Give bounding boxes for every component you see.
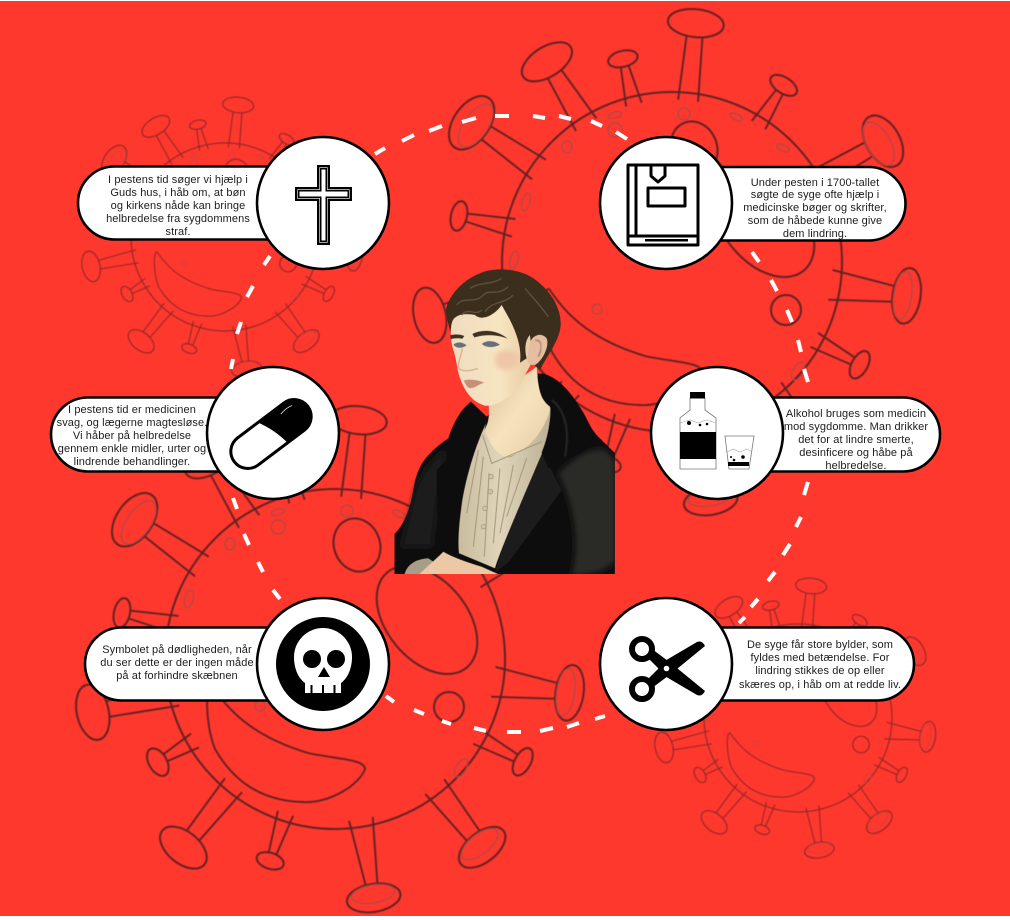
background virus: bottom right <box>652 577 938 860</box>
hood fold <box>552 400 567 457</box>
text bubble: boils: lindring stikkes de op eller <box>755 665 885 677</box>
item: medicine capsule <box>51 367 339 499</box>
text bubble: death: du ser dette er der ingen måde <box>100 657 254 669</box>
item: church cross <box>78 137 389 269</box>
text bubble: church <box>78 166 338 240</box>
hands <box>418 552 500 575</box>
text bubble: church: straf. <box>165 226 191 238</box>
nose <box>458 348 478 371</box>
text bubble: boils: fyldes med betændelse. For <box>751 652 890 664</box>
icon: skull <box>257 598 389 730</box>
text bubble: book: søgte de syge ofte hjælp i <box>751 189 879 201</box>
hair front <box>446 269 557 363</box>
eyebrows <box>450 331 508 339</box>
text bubble: alcohol: helbredelse. <box>825 460 887 472</box>
icon: bottle and glass <box>651 367 783 499</box>
item: medical book <box>600 137 906 269</box>
text bubble: medicine <box>51 398 311 472</box>
item: alcohol <box>651 367 940 499</box>
text bubble: alcohol: Alkohol bruges som medicin <box>786 408 926 420</box>
text bubble: medicine: gennem enkle midler, urter og <box>58 443 206 455</box>
lips <box>464 380 484 388</box>
text bubble: medicine: lindrende behandlinger. <box>74 456 190 468</box>
text bubble: death: Symbolet på dødligheden, når <box>102 644 252 656</box>
text bubble: boils <box>660 628 914 700</box>
text bubble: boils: skæres op, i håb om at redde liv. <box>739 679 901 691</box>
text bubble: medicine: Vi håber på helbredelse <box>73 430 191 442</box>
text bubble: boils: De syge får store bylder, som <box>747 639 893 651</box>
background virus: top left <box>79 96 365 379</box>
icon: cross <box>257 137 389 269</box>
right lapel <box>496 453 562 572</box>
text bubble: alcohol: det for at lindre smerte, <box>798 434 914 446</box>
text bubble: church: og kirkens nåde kan bringe <box>111 200 245 212</box>
shirt pleats and buttons <box>467 435 542 557</box>
background virus: bottom left <box>71 403 587 916</box>
icon: capsule <box>207 367 339 499</box>
bottle <box>680 392 716 469</box>
hair <box>446 269 561 370</box>
text bubble: church: helbredelse fra sygdommens <box>106 213 250 225</box>
shirt buttons <box>481 474 493 529</box>
text bubble: church: Guds hus, i håb om, at bøn <box>110 187 246 199</box>
text bubble: death <box>85 628 345 700</box>
jacket <box>394 373 615 575</box>
ear shadow <box>535 340 541 357</box>
text bubble: medicine: svag, og lægerne magtesløse. <box>57 417 207 429</box>
cheek shading <box>495 350 519 370</box>
text bubble: death: på at forhindre skæbnen <box>116 670 238 682</box>
neck <box>484 367 551 457</box>
ear <box>527 335 547 365</box>
text bubble: church: I pestens tid søger vi hjælp i <box>108 174 248 186</box>
text bubble: book <box>650 167 906 240</box>
text bubble: book: Under pesten i 1700-tallet <box>751 177 879 189</box>
eyes <box>453 341 500 348</box>
text bubble: alcohol: desinficere og håbe på <box>799 447 914 459</box>
hood <box>538 373 602 468</box>
background virus: top right <box>408 6 924 519</box>
icon: book <box>600 137 732 269</box>
text bubble: alcohol <box>700 398 940 472</box>
shirt cuff <box>404 558 433 575</box>
text bubble: medicine: I pestens tid er medicinen <box>68 404 196 416</box>
dashed ring connecting the icons <box>231 116 808 732</box>
text bubble: book: dem lindring. <box>783 228 847 240</box>
text bubble: book: som de håbede kunne give <box>748 215 882 227</box>
item: scissors <box>600 598 914 730</box>
jacket sleeve sheen <box>558 449 615 575</box>
left lapel <box>437 460 459 532</box>
glass <box>725 436 754 469</box>
central portrait of a young man <box>394 269 615 575</box>
left sleeve sheen <box>402 450 445 547</box>
icon: scissors <box>600 598 732 730</box>
shirt <box>458 407 551 568</box>
face <box>451 303 533 406</box>
item: skull <box>85 598 389 730</box>
text bubble: alcohol: mod sygdomme. Man drikker <box>784 421 928 433</box>
text bubble: book: medicinske bøger og skrifter, <box>743 202 887 214</box>
hair curls <box>457 278 548 317</box>
